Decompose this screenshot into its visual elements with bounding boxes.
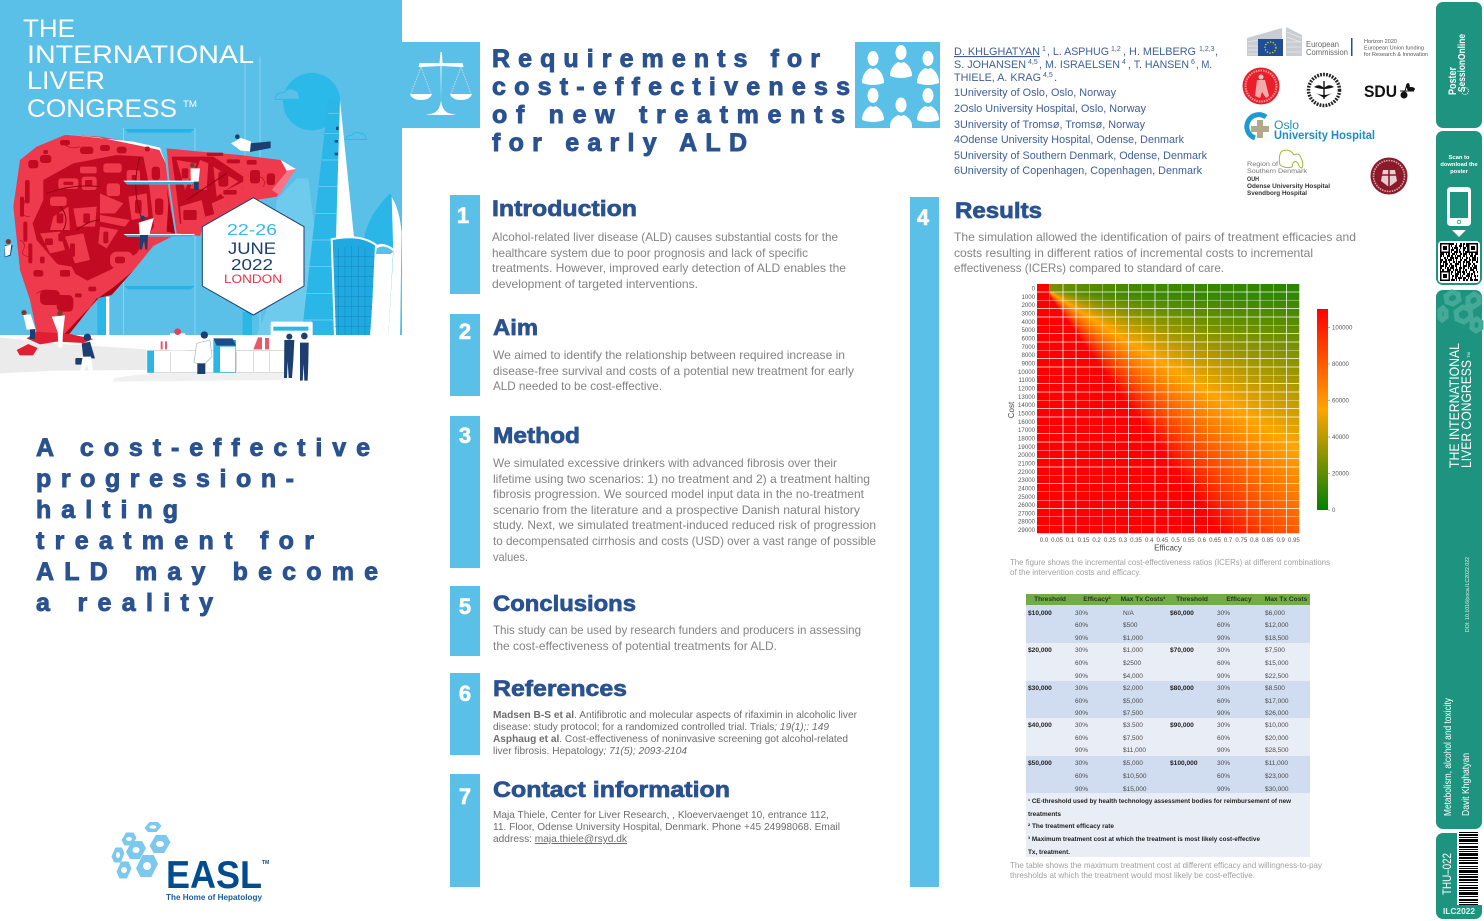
- sidebar: abstract number and barcode: ILC2022: [1443, 906, 1475, 916]
- table: maximum treatment cost: $17,000: [1265, 698, 1289, 705]
- axes, labels and colour bar: 0.35: [1130, 537, 1143, 544]
- table: maximum treatment cost: $20,000: [1028, 647, 1052, 654]
- panel: method: values.: [493, 550, 528, 564]
- table: maximum treatment cost: ² The treatment efficacy rate: [1028, 823, 1114, 830]
- table: maximum treatment cost: 90%: [1217, 786, 1230, 793]
- authors and affiliations: .: [1054, 72, 1057, 84]
- panel: results header and text: [910, 197, 1356, 887]
- axes, labels and colour bar: 11000: [1018, 377, 1036, 384]
- table: maximum treatment cost: $15,000: [1123, 786, 1147, 793]
- axes, labels and colour bar: 15000: [1018, 410, 1036, 418]
- table: maximum treatment cost: $20,000: [1265, 735, 1289, 742]
- axes, labels and colour bar: 21000: [1018, 460, 1036, 467]
- table: maximum treatment cost: 30%: [1075, 760, 1088, 767]
- axes, labels and colour bar: 0.55: [1183, 537, 1195, 544]
- axes, labels and colour bar: 0.5: [1171, 537, 1180, 544]
- table: maximum treatment cost: 90%: [1075, 635, 1088, 642]
- heading: requirements: cost-effectiveness: [492, 73, 850, 101]
- sidebar: poster session online: SessionOnline: [1456, 34, 1468, 92]
- heading: requirements: [492, 45, 850, 157]
- authors and affiliations: 4: [1122, 59, 1126, 66]
- logo: Region of Southern Denmark / OUH: OUH: [1247, 177, 1259, 183]
- table: maximum treatment cost: 60%: [1217, 773, 1230, 780]
- table: maximum treatment cost: 30%: [1075, 722, 1088, 729]
- axes, labels and colour bar: 0.15: [1078, 537, 1090, 544]
- table: maximum treatment cost: $70,000: [1170, 647, 1194, 654]
- logo: Oslo University Hospital: Oslo: [1274, 120, 1299, 132]
- table: maximum treatment cost: 30%: [1075, 610, 1088, 617]
- axes, labels and colour bar: 13000: [1018, 394, 1036, 401]
- axes, labels and colour bar: 7000: [1021, 344, 1036, 351]
- table: maximum treatment cost: 90%: [1217, 710, 1230, 717]
- panel: aim: Aim: [493, 315, 538, 340]
- congress name: LIVER: [27, 67, 105, 95]
- logo: Oslo University Hospital: [1247, 115, 1375, 142]
- table: maximum treatment cost: 90%: [1075, 747, 1088, 754]
- table: maximum treatment cost: Max Tx Costs: [1265, 596, 1308, 603]
- panel: results header and text: costs resulting in different ratios of incremental costs to incremental: [954, 246, 1313, 260]
- axes, labels and colour bar: 20000: [1332, 470, 1350, 478]
- table: maximum treatment cost: 30%: [1075, 647, 1088, 654]
- table: maximum treatment cost: Threshold: [1034, 596, 1066, 603]
- congress name: INTERNATIONAL: [27, 41, 254, 69]
- main poster title: A cost-effective: [36, 434, 370, 462]
- figure caption: [1010, 557, 1330, 577]
- axes, labels and colour bar: 100000: [1332, 324, 1353, 332]
- authors and affiliations: 6University of Copenhagen, Copenhagen, Denmark: [954, 165, 1202, 177]
- table: maximum treatment cost: 90%: [1075, 710, 1088, 717]
- logo: University of Oslo seal: [1242, 68, 1280, 104]
- axes, labels and colour bar: 0.65: [1209, 537, 1222, 544]
- table: maximum treatment cost: $18,500: [1265, 635, 1289, 642]
- axes, labels and colour bar: 0.6: [1198, 537, 1207, 544]
- table: maximum treatment cost: $7,500: [1265, 647, 1285, 654]
- congress name: CONGRESS: [27, 95, 177, 123]
- table: maximum treatment cost: $80,000: [1170, 685, 1194, 692]
- axes, labels and colour bar: 14000: [1018, 402, 1036, 409]
- panel: contact information: Contact information: [493, 777, 730, 802]
- table: maximum treatment cost: $6,000: [1265, 610, 1285, 617]
- logo: Region of Southern Denmark / OUH: Odense University Hospital: [1247, 184, 1330, 190]
- panel: conclusions: Conclusions: [493, 591, 636, 616]
- main poster title: halting: [36, 496, 178, 524]
- table: maximum treatment cost: $28,500: [1265, 747, 1289, 754]
- axes, labels and colour bar: Efficacy: [1154, 544, 1182, 552]
- table: maximum treatment cost: ³ Maximum treatment cost at which the treatment is most likely cost-effective: [1028, 836, 1260, 843]
- table: maximum treatment cost: $10,500: [1123, 773, 1147, 780]
- panel: contact information: 7: [459, 784, 471, 809]
- table: maximum treatment cost: 60%: [1217, 660, 1230, 667]
- axes, labels and colour bar: 0.9: [1276, 537, 1286, 544]
- table: maximum treatment cost: $22,500: [1265, 673, 1289, 680]
- panel: introduction: healthcare system due to poor prognosis and lack of specific: [492, 246, 808, 260]
- logo: European Commission and Horizon 2020: Horizon 2020: [1364, 39, 1397, 45]
- congress name: TM: [183, 99, 197, 109]
- sidebar: abstract number and barcode: THU–022: [1440, 853, 1454, 895]
- panel: references: Madsen B-S et al. Antifibrotic and molecular aspects of rifaximin in alcoholic liver: [493, 709, 857, 721]
- sidebar: congress strip: Davit Khghatyan: [1460, 753, 1472, 816]
- table: maximum treatment cost: 30%: [1217, 647, 1230, 654]
- logo: Region of Southern Denmark / OUH: Svendborg Hospital: [1247, 191, 1307, 197]
- table: maximum treatment cost: 60%: [1075, 660, 1088, 667]
- table: maximum treatment cost: 90%: [1217, 747, 1230, 754]
- table caption: [1010, 860, 1323, 880]
- axes, labels and colour bar: 0.75: [1235, 537, 1248, 544]
- logo: European Commission and Horizon 2020: European: [1306, 40, 1339, 49]
- table: maximum treatment cost: $3.500: [1123, 722, 1143, 729]
- table: maximum treatment cost: $90,000: [1170, 722, 1194, 729]
- logo: EASL: The Home of Hepatology: [166, 892, 262, 902]
- table: maximum treatment cost: 90%: [1075, 673, 1088, 680]
- axes, labels and colour bar: 0.25: [1104, 537, 1116, 544]
- sidebar: congress strip: TM: [1466, 352, 1471, 358]
- panel: introduction: Alcohol-related liver disease (ALD) causes substantial costs for the: [492, 230, 838, 244]
- authors and affiliations: 4Odense University Hospital, Odense, Denmark: [954, 134, 1184, 146]
- panel: introduction: treatments. However, improved early detection of ALD enables the: [492, 261, 846, 275]
- sidebar: poster session online: [1436, 2, 1482, 128]
- panel: method: [450, 416, 876, 568]
- date label: 2022: [231, 257, 273, 274]
- table: maximum treatment cost: Efficacy: [1226, 596, 1252, 603]
- main poster title: progression-: [36, 465, 294, 493]
- panel: results header and text: Results: [955, 198, 1042, 223]
- table: maximum treatment cost: Efficacy²: [1083, 596, 1112, 603]
- table: maximum treatment cost: $11,000: [1123, 747, 1146, 754]
- QR code: [1438, 241, 1480, 283]
- sidebar: congress strip: THE INTERNATIONAL: [1446, 343, 1462, 468]
- sidebar: scan to download: Scan to: [1449, 155, 1470, 161]
- logo: EASL: TM: [262, 860, 269, 866]
- panel: method: study. Next, we simulated treatment-induced reduced risk of progression: [493, 518, 876, 532]
- congress name: THE: [23, 15, 75, 43]
- table: maximum treatment cost: $60,000: [1170, 610, 1194, 617]
- table: maximum treatment cost: $10,000: [1028, 610, 1052, 617]
- axes, labels and colour bar: 0.2: [1092, 537, 1101, 544]
- panel: aim: disease-free survival and costs of a potential new treatment for early: [493, 364, 854, 378]
- axes, labels and colour bar: 24000: [1018, 485, 1036, 492]
- axes, labels and colour bar: 23000: [1018, 477, 1036, 484]
- table: maximum treatment cost: 60%: [1217, 735, 1230, 742]
- table caption: thresholds at which the treatment would most likely be cost-effective.: [1010, 870, 1255, 880]
- panel: conclusions: 5: [459, 594, 471, 619]
- axes, labels and colour bar: 0: [1332, 507, 1336, 514]
- logo: University of Tromsø seal: [1308, 74, 1340, 106]
- table: maximum treatment cost: N/A: [1123, 610, 1134, 617]
- table: maximum treatment cost: Tx, treatment.: [1028, 849, 1070, 856]
- panel: method: to decompensated cirrhosis and costs (USD) over a vast range of possible: [493, 534, 876, 548]
- axes, labels and colour bar: 8000: [1021, 352, 1036, 359]
- table: maximum treatment cost: $23,000: [1265, 773, 1289, 780]
- axes, labels and colour bar: 4000: [1021, 319, 1036, 326]
- authors and affiliations: , H. MELBERG: [1123, 46, 1196, 58]
- panel: results header and text: effectiveness (ICERs) compared to standard of care.: [954, 261, 1224, 275]
- chart: ICER heatmap: [1007, 284, 1353, 552]
- panel: introduction: development of targeted interventions.: [492, 277, 698, 291]
- logo: SDU: [1364, 83, 1415, 101]
- table: maximum treatment cost: 60%: [1075, 622, 1088, 629]
- main poster title: a reality: [36, 589, 213, 617]
- panel: aim: [450, 314, 854, 396]
- figure caption: of the intervention costs and efficacy.: [1010, 567, 1141, 577]
- axes, labels and colour bar: 0.1: [1066, 537, 1075, 544]
- sidebar: congress strip: [1436, 290, 1482, 829]
- axes, labels and colour bar: 40000: [1332, 434, 1350, 441]
- table: maximum treatment cost: $26,000: [1265, 710, 1289, 717]
- axes, labels and colour bar: 80000: [1332, 361, 1350, 368]
- table: maximum treatment cost: $40,000: [1028, 722, 1052, 729]
- table: maximum treatment cost: Threshold: [1176, 596, 1208, 603]
- authors and affiliations: 4,5: [1043, 72, 1053, 79]
- panel: contact information: 11. Floor, Odense University Hospital, Denmark. Phone +45 24998068. Email: [493, 821, 840, 833]
- panel: aim: 2: [459, 319, 471, 344]
- logo: European Commission and Horizon 2020: for Research & Innovation: [1364, 52, 1428, 58]
- congress name: [23, 15, 254, 123]
- axes, labels and colour bar: 16000: [1018, 419, 1036, 426]
- authors and affiliations: 1: [1042, 46, 1046, 53]
- table: maximum treatment cost: $2,000: [1123, 685, 1143, 692]
- table: maximum treatment cost: $12,000: [1265, 622, 1289, 629]
- table: maximum treatment cost: $10,000: [1265, 722, 1289, 729]
- table: maximum treatment cost: $11,000: [1265, 760, 1288, 767]
- table: maximum treatment cost: Max Tx Costs³: [1121, 596, 1166, 603]
- table: maximum treatment cost: 60%: [1075, 735, 1088, 742]
- lab bench: [147, 351, 286, 373]
- table: maximum treatment cost: $1,000: [1123, 635, 1143, 642]
- axes, labels and colour bar: 1000: [1021, 294, 1036, 301]
- logo: Region of Southern Denmark / OUH: Southern Denmark: [1247, 168, 1308, 175]
- panel: references: [450, 673, 857, 757]
- panel: introduction: Introduction: [492, 196, 637, 221]
- logo: European Commission and Horizon 2020: European Union funding: [1364, 46, 1424, 52]
- heading: requirements: of new treatments: [492, 101, 845, 129]
- axes, labels and colour bar: 27000: [1018, 510, 1036, 517]
- axes, labels and colour bar: 60000: [1332, 398, 1350, 404]
- authors and affiliations: ,: [1215, 46, 1218, 58]
- illustration: liver and London skyline: [0, 57, 402, 390]
- date hexagon: [202, 198, 304, 315]
- table: maximum treatment cost: $500: [1123, 622, 1138, 629]
- table: maximum treatment cost: 90%: [1217, 673, 1230, 680]
- axes, labels and colour bar: 0: [1032, 286, 1036, 292]
- authors and affiliations: 1,2,3: [1199, 46, 1215, 53]
- panel: aim: ALD needed to be cost-effective.: [493, 379, 662, 393]
- sidebar: congress strip: Metabolism, alcohol and toxicity: [1442, 697, 1454, 816]
- panel: references: 6: [459, 681, 471, 706]
- table: maximum treatment cost: [1026, 594, 1310, 857]
- authors and affiliations: 1University of Oslo, Oslo, Norway: [954, 87, 1116, 99]
- authors and affiliations: 4,5: [1028, 59, 1038, 66]
- axes, labels and colour bar: 26000: [1018, 502, 1036, 509]
- sidebar: congress strip: DOI: 10.1016/poca.ILC2022.022: [1465, 557, 1471, 632]
- table: maximum treatment cost: 30%: [1217, 610, 1230, 617]
- table: maximum treatment cost: 60%: [1217, 698, 1230, 705]
- axes, labels and colour bar: 10000: [1018, 369, 1036, 376]
- people: [5, 134, 309, 381]
- axes, labels and colour bar: 9000: [1021, 360, 1036, 368]
- authors and affiliations: , M. ISRAELSEN: [1039, 59, 1120, 71]
- axes, labels and colour bar: 12000: [1018, 386, 1036, 392]
- liver: [13, 135, 175, 337]
- table: maximum treatment cost: $30,000: [1028, 685, 1052, 692]
- table: maximum treatment cost: 60%: [1217, 622, 1230, 629]
- axes, labels and colour bar: 0.95: [1288, 537, 1300, 544]
- axes, labels and colour bar: 0.4: [1145, 537, 1154, 544]
- panel: contact information: [450, 774, 840, 887]
- authors and affiliations: 3University of Tromsø, Tromsø, Norway: [954, 119, 1145, 131]
- icon: group of people: [855, 42, 940, 128]
- table: maximum treatment cost: $2500: [1123, 660, 1141, 667]
- table caption: The table shows the maximum treatment cost at different efficacy and willingness-to-pay: [1010, 860, 1323, 870]
- axes, labels and colour bar: 6000: [1021, 336, 1036, 342]
- logo: EASL: [112, 822, 269, 902]
- panel: references: liver fibrosis. Hepatology; 71(5); 2093-2104: [493, 745, 687, 757]
- axes, labels and colour bar: 0.0: [1040, 537, 1049, 544]
- table: maximum treatment cost: $7,500: [1123, 710, 1143, 717]
- axes, labels and colour bar: 0.8: [1250, 537, 1259, 544]
- axes, labels and colour bar: 19000: [1018, 444, 1036, 451]
- sidebar: abstract number and barcode: [1436, 830, 1482, 919]
- icon: phone: [1447, 187, 1471, 237]
- panel: congress banner illustration: [0, 0, 402, 390]
- axes, labels and colour bar: 0.05: [1051, 537, 1064, 544]
- table: maximum treatment cost: 30%: [1217, 722, 1230, 729]
- panel: results header and text: 4: [917, 205, 930, 230]
- authors and affiliations: 1,2: [1111, 46, 1121, 53]
- logo: EASL: EASL: [166, 854, 262, 897]
- axes, labels and colour bar: 22000: [1018, 469, 1036, 476]
- panel: method: lifetime using two scenarios: 1) no treatment and 2) a treatment halting: [493, 472, 870, 486]
- table: maximum treatment cost: $5,000: [1123, 760, 1143, 767]
- logo: Region of Southern Denmark / OUH: Region of: [1247, 161, 1278, 168]
- table: maximum treatment cost: 60%: [1075, 773, 1088, 780]
- axes, labels and colour bar: 5000: [1021, 327, 1036, 334]
- table: maximum treatment cost: $15,000: [1265, 660, 1289, 667]
- authors and affiliations: THIELE, A. KRAG: [954, 72, 1041, 84]
- axes, labels and colour bar: 20000: [1018, 452, 1036, 459]
- table: maximum treatment cost: ¹ CE-threshold used by health technology assessment bodies for reimbursement of new: [1028, 798, 1292, 805]
- table: maximum treatment cost: $7,500: [1123, 735, 1143, 742]
- axes, labels and colour bar: 0.45: [1156, 537, 1169, 544]
- panel: references: References: [493, 676, 627, 701]
- axes, labels and colour bar: 29000: [1018, 527, 1036, 534]
- logo: University of Copenhagen seal: [1370, 158, 1408, 194]
- authors and affiliations: 5University of Southern Denmark, Odense, Denmark: [954, 150, 1207, 162]
- panel: conclusions: [450, 586, 861, 656]
- axes, labels and colour bar: 28000: [1018, 519, 1036, 526]
- panel: introduction: 1: [457, 203, 469, 228]
- authors and affiliations: S. JOHANSEN: [954, 59, 1026, 71]
- panel: conclusions: the cost-effectiveness of potential treatments for ALD.: [493, 639, 777, 653]
- icon: scales of justice: [402, 42, 480, 128]
- table: maximum treatment cost: treatments: [1028, 811, 1061, 818]
- panel: introduction: [450, 195, 846, 294]
- ground: [0, 335, 402, 390]
- heading: requirements: for early ALD: [492, 129, 747, 157]
- table: maximum treatment cost: 30%: [1217, 685, 1230, 692]
- table: maximum treatment cost: 90%: [1217, 635, 1230, 642]
- platforms: [123, 181, 195, 237]
- date label: [224, 222, 282, 286]
- panel: references: disease: study protocol; for a randomized controlled trial. Trials; 19(1);: 149: [493, 721, 829, 733]
- authors and affiliations: , M.: [1196, 59, 1212, 71]
- axes, labels and colour bar: 0.7: [1224, 537, 1233, 544]
- panel: conclusions: This study can be used by research funders and producers in assessing: [493, 623, 861, 637]
- authors and affiliations: 2Oslo University Hospital, Oslo, Norway: [954, 103, 1146, 115]
- table: maximum treatment cost: $4,000: [1123, 673, 1143, 680]
- axes, labels and colour bar: Cost: [1007, 401, 1016, 418]
- panel: method: fibrosis progression. We sourced model input data in the no-treatment: [493, 487, 865, 501]
- table: maximum treatment cost: $50,000: [1028, 760, 1052, 767]
- panel: aim: We aimed to identify the relationship between required increase in: [493, 348, 845, 362]
- table: maximum treatment cost: 90%: [1075, 786, 1088, 793]
- panel: contact information: address: maja.thiele@rsyd.dk: [493, 833, 628, 845]
- sidebar: poster session online: Poster: [1447, 66, 1459, 95]
- figure caption: The figure shows the incremental cost-effectiveness ratios (ICERs) at different combinations: [1010, 557, 1330, 567]
- panel: results header and text: The simulation allowed the identification of pairs of treatment efficacies and: [954, 230, 1356, 244]
- table: maximum treatment cost: $8.500: [1265, 685, 1285, 692]
- axes, labels and colour bar: 0.85: [1262, 537, 1274, 544]
- table: maximum treatment cost: $30,000: [1265, 786, 1289, 793]
- authors and affiliations: , T. HANSEN: [1128, 59, 1189, 71]
- heading: requirements: Requirements for: [492, 45, 820, 73]
- panel: method: 3: [459, 423, 471, 448]
- table: maximum treatment cost: 30%: [1217, 760, 1230, 767]
- panel: method: We simulated excessive drinkers with advanced fibrosis over their: [493, 456, 837, 470]
- panel: contact information: Maja Thiele, Center for Liver Research, , Kloevervaenget 10, entrance 112,: [493, 809, 829, 821]
- date label: 22-26: [227, 222, 277, 239]
- logo: SDU: SDU: [1364, 83, 1397, 101]
- axes, labels and colour bar: 18000: [1018, 435, 1036, 442]
- authors and affiliations: , L. ASPHUG: [1047, 46, 1109, 58]
- panel: references: Asphaug et al. Cost-effectiveness of noninvasive screening got alcohol-related: [493, 733, 848, 745]
- logo: European Commission and Horizon 2020: [1247, 27, 1428, 58]
- table: maximum treatment cost: $5,000: [1123, 698, 1143, 705]
- table: maximum treatment cost: $100,000: [1170, 760, 1198, 767]
- panel: method: Method: [493, 423, 580, 448]
- heatmap cells: [1037, 284, 1300, 534]
- authors and affiliations: 6: [1191, 59, 1195, 66]
- logo: Region of Southern Denmark / OUH: [1247, 150, 1330, 197]
- axes, labels and colour bar: 25000: [1018, 494, 1036, 501]
- main poster title: [36, 434, 378, 617]
- main poster title: treatment for: [36, 527, 314, 555]
- date label: JUNE: [228, 239, 276, 258]
- sidebar: scan to download: download the: [1440, 162, 1478, 168]
- sidebar: scan to download: [1436, 131, 1482, 285]
- panel: method: scenario from the literature and a prospective Danish natural history: [493, 503, 860, 517]
- table: maximum treatment cost: $1,000: [1123, 647, 1143, 654]
- logo: Oslo University Hospital: University Hospital: [1274, 130, 1375, 142]
- axes, labels and colour bar: 0.3: [1119, 537, 1128, 544]
- sidebar: scan to download: poster: [1450, 169, 1469, 175]
- main poster title: ALD may become: [36, 558, 378, 586]
- table: maximum treatment cost: 30%: [1075, 685, 1088, 692]
- axes, labels and colour bar: 17000: [1018, 427, 1036, 434]
- date label: LONDON: [224, 272, 282, 286]
- axes, labels and colour bar: 2000: [1021, 302, 1036, 309]
- authors and affiliations: [954, 46, 1218, 177]
- sidebar: congress strip: LIVER CONGRESS: [1458, 360, 1474, 468]
- axes, labels and colour bar: [1007, 286, 1353, 552]
- table: maximum treatment cost: 60%: [1075, 698, 1088, 705]
- logo: European Commission and Horizon 2020: Commission: [1306, 48, 1348, 57]
- authors and affiliations: D. KHLGHATYAN: [954, 46, 1040, 58]
- axes, labels and colour bar: 3000: [1021, 310, 1036, 318]
